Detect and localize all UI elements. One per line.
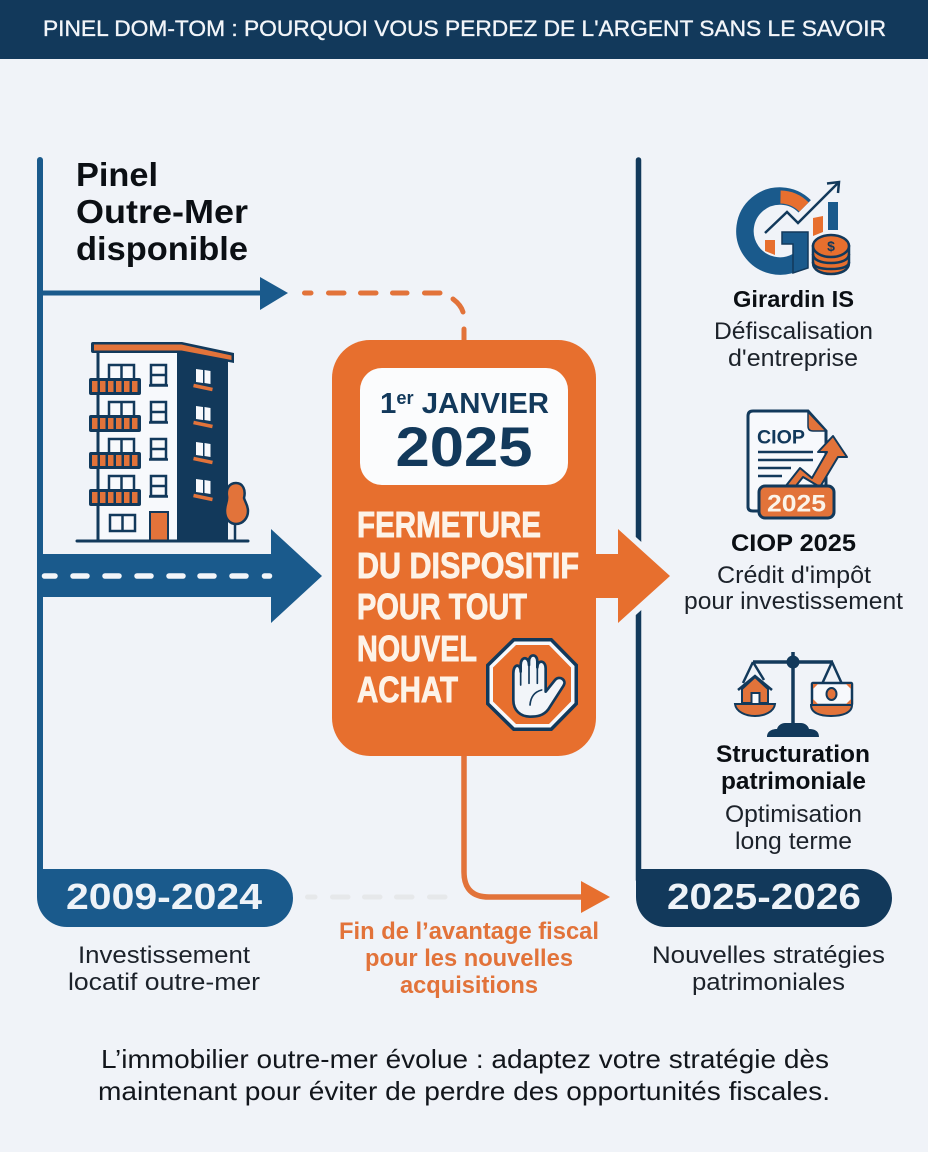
- caption: 2009-2024: Investissement: [78, 942, 250, 969]
- arrow: road to closure: [37, 529, 322, 623]
- label: CIOP 2025: CIOP 2025: [731, 530, 856, 557]
- caption: 2025-2026: patrimoniales: [692, 969, 845, 996]
- closure text: POUR TOUT: [357, 586, 527, 627]
- date card: JANVIER: [414, 388, 549, 420]
- title: PINEL DOM-TOM : POURQUOI VOUS PERDEZ DE L'ARGENT SANS LE SAVOIR: [43, 16, 886, 41]
- closure text: DU DISPOSITIF: [357, 545, 579, 586]
- house: [742, 677, 768, 703]
- period pill: 2009-2024: [37, 869, 293, 927]
- faded dashed path: [308, 894, 445, 900]
- date card: 2025: [396, 415, 532, 478]
- icon: Girardin G chart: [745, 182, 849, 274]
- closing message: [98, 1044, 830, 1106]
- arrow: availability to closure: [43, 277, 288, 310]
- floors: [89, 365, 168, 531]
- icon: CIOP document: CIOP: [757, 428, 805, 448]
- period pill: 2025-2026: 2025-2026: [667, 876, 861, 917]
- icon: balance scale: [735, 652, 852, 737]
- closure text: ACHAT: [357, 669, 458, 710]
- closing message: L’immobilier outre-mer évolue : adaptez votre stratégie dès: [101, 1044, 829, 1074]
- caption: 2009-2024: [68, 942, 260, 996]
- side windows: [196, 369, 210, 494]
- caption: 2009-2024: locatif outre-mer: [68, 969, 260, 996]
- text: CIOP description: Crédit d'impôt: [717, 562, 871, 589]
- label: Structuration patrimoniale: patrimoniale: [721, 768, 866, 795]
- period pill: 2025-2026: [636, 869, 892, 927]
- panel: closure: [332, 340, 596, 756]
- arrow: closure to new strategies: [590, 529, 670, 623]
- text: Girardin description: d'entreprise: [728, 345, 858, 372]
- text: CIOP description: pour investissement: [684, 588, 903, 615]
- closure text: FERMETURE: [357, 504, 541, 545]
- header banner: [0, 0, 928, 59]
- icon: apartment building: [77, 342, 248, 541]
- arrow: end of tax advantage: [464, 756, 610, 913]
- icon: stop hand: [486, 638, 578, 731]
- caption: end of tax advantage: pour les nouvelles: [365, 945, 573, 972]
- coins: [813, 235, 849, 274]
- caption: 2025-2026: [652, 942, 885, 996]
- date card: [360, 368, 568, 485]
- period pill: 2009-2024: 2009-2024: [66, 876, 262, 917]
- dashed connector to closure box: [304, 293, 464, 342]
- heading: Pinel Outre-Mer disponible: Outre-Mer: [76, 193, 248, 230]
- heading: Pinel Outre-Mer disponible: disponible: [76, 230, 248, 267]
- text: Girardin description: [714, 318, 873, 372]
- closure text: NOUVEL: [357, 628, 477, 669]
- text: structuration description: long terme: [735, 828, 852, 855]
- text: CIOP description: [684, 562, 903, 615]
- caption: end of tax advantage: [339, 918, 599, 999]
- text: structuration description: [725, 801, 862, 855]
- tree: [234, 522, 236, 541]
- caption: end of tax advantage: acquisitions: [400, 972, 538, 999]
- heading: Pinel Outre-Mer disponible: [76, 156, 248, 267]
- caption: end of tax advantage: Fin de l’avantage fiscal: [339, 918, 599, 945]
- icon: Girardin G chart: $: [827, 238, 835, 254]
- text: structuration description: Optimisation: [725, 801, 862, 828]
- heading: Pinel Outre-Mer disponible: Pinel: [76, 156, 158, 193]
- ground: [77, 540, 248, 542]
- closure text: [357, 504, 579, 710]
- icon: CIOP document: [748, 411, 847, 518]
- label: Structuration patrimoniale: [716, 741, 870, 795]
- label: Girardin IS: Girardin IS: [733, 286, 854, 312]
- caption: 2025-2026: Nouvelles stratégies: [652, 942, 885, 969]
- label: Structuration patrimoniale: Structuration: [716, 741, 870, 768]
- door: [150, 512, 168, 541]
- icon: CIOP document: 2025: [767, 490, 826, 518]
- right timeline axis: [636, 160, 641, 880]
- date card: 1: [380, 388, 396, 420]
- date card: er: [396, 388, 414, 408]
- bank note: [812, 683, 852, 705]
- left timeline axis: [37, 160, 43, 880]
- closing message: maintenant pour éviter de perdre des opportunités fiscales.: [98, 1076, 830, 1106]
- text: Girardin description: Défiscalisation: [714, 318, 873, 345]
